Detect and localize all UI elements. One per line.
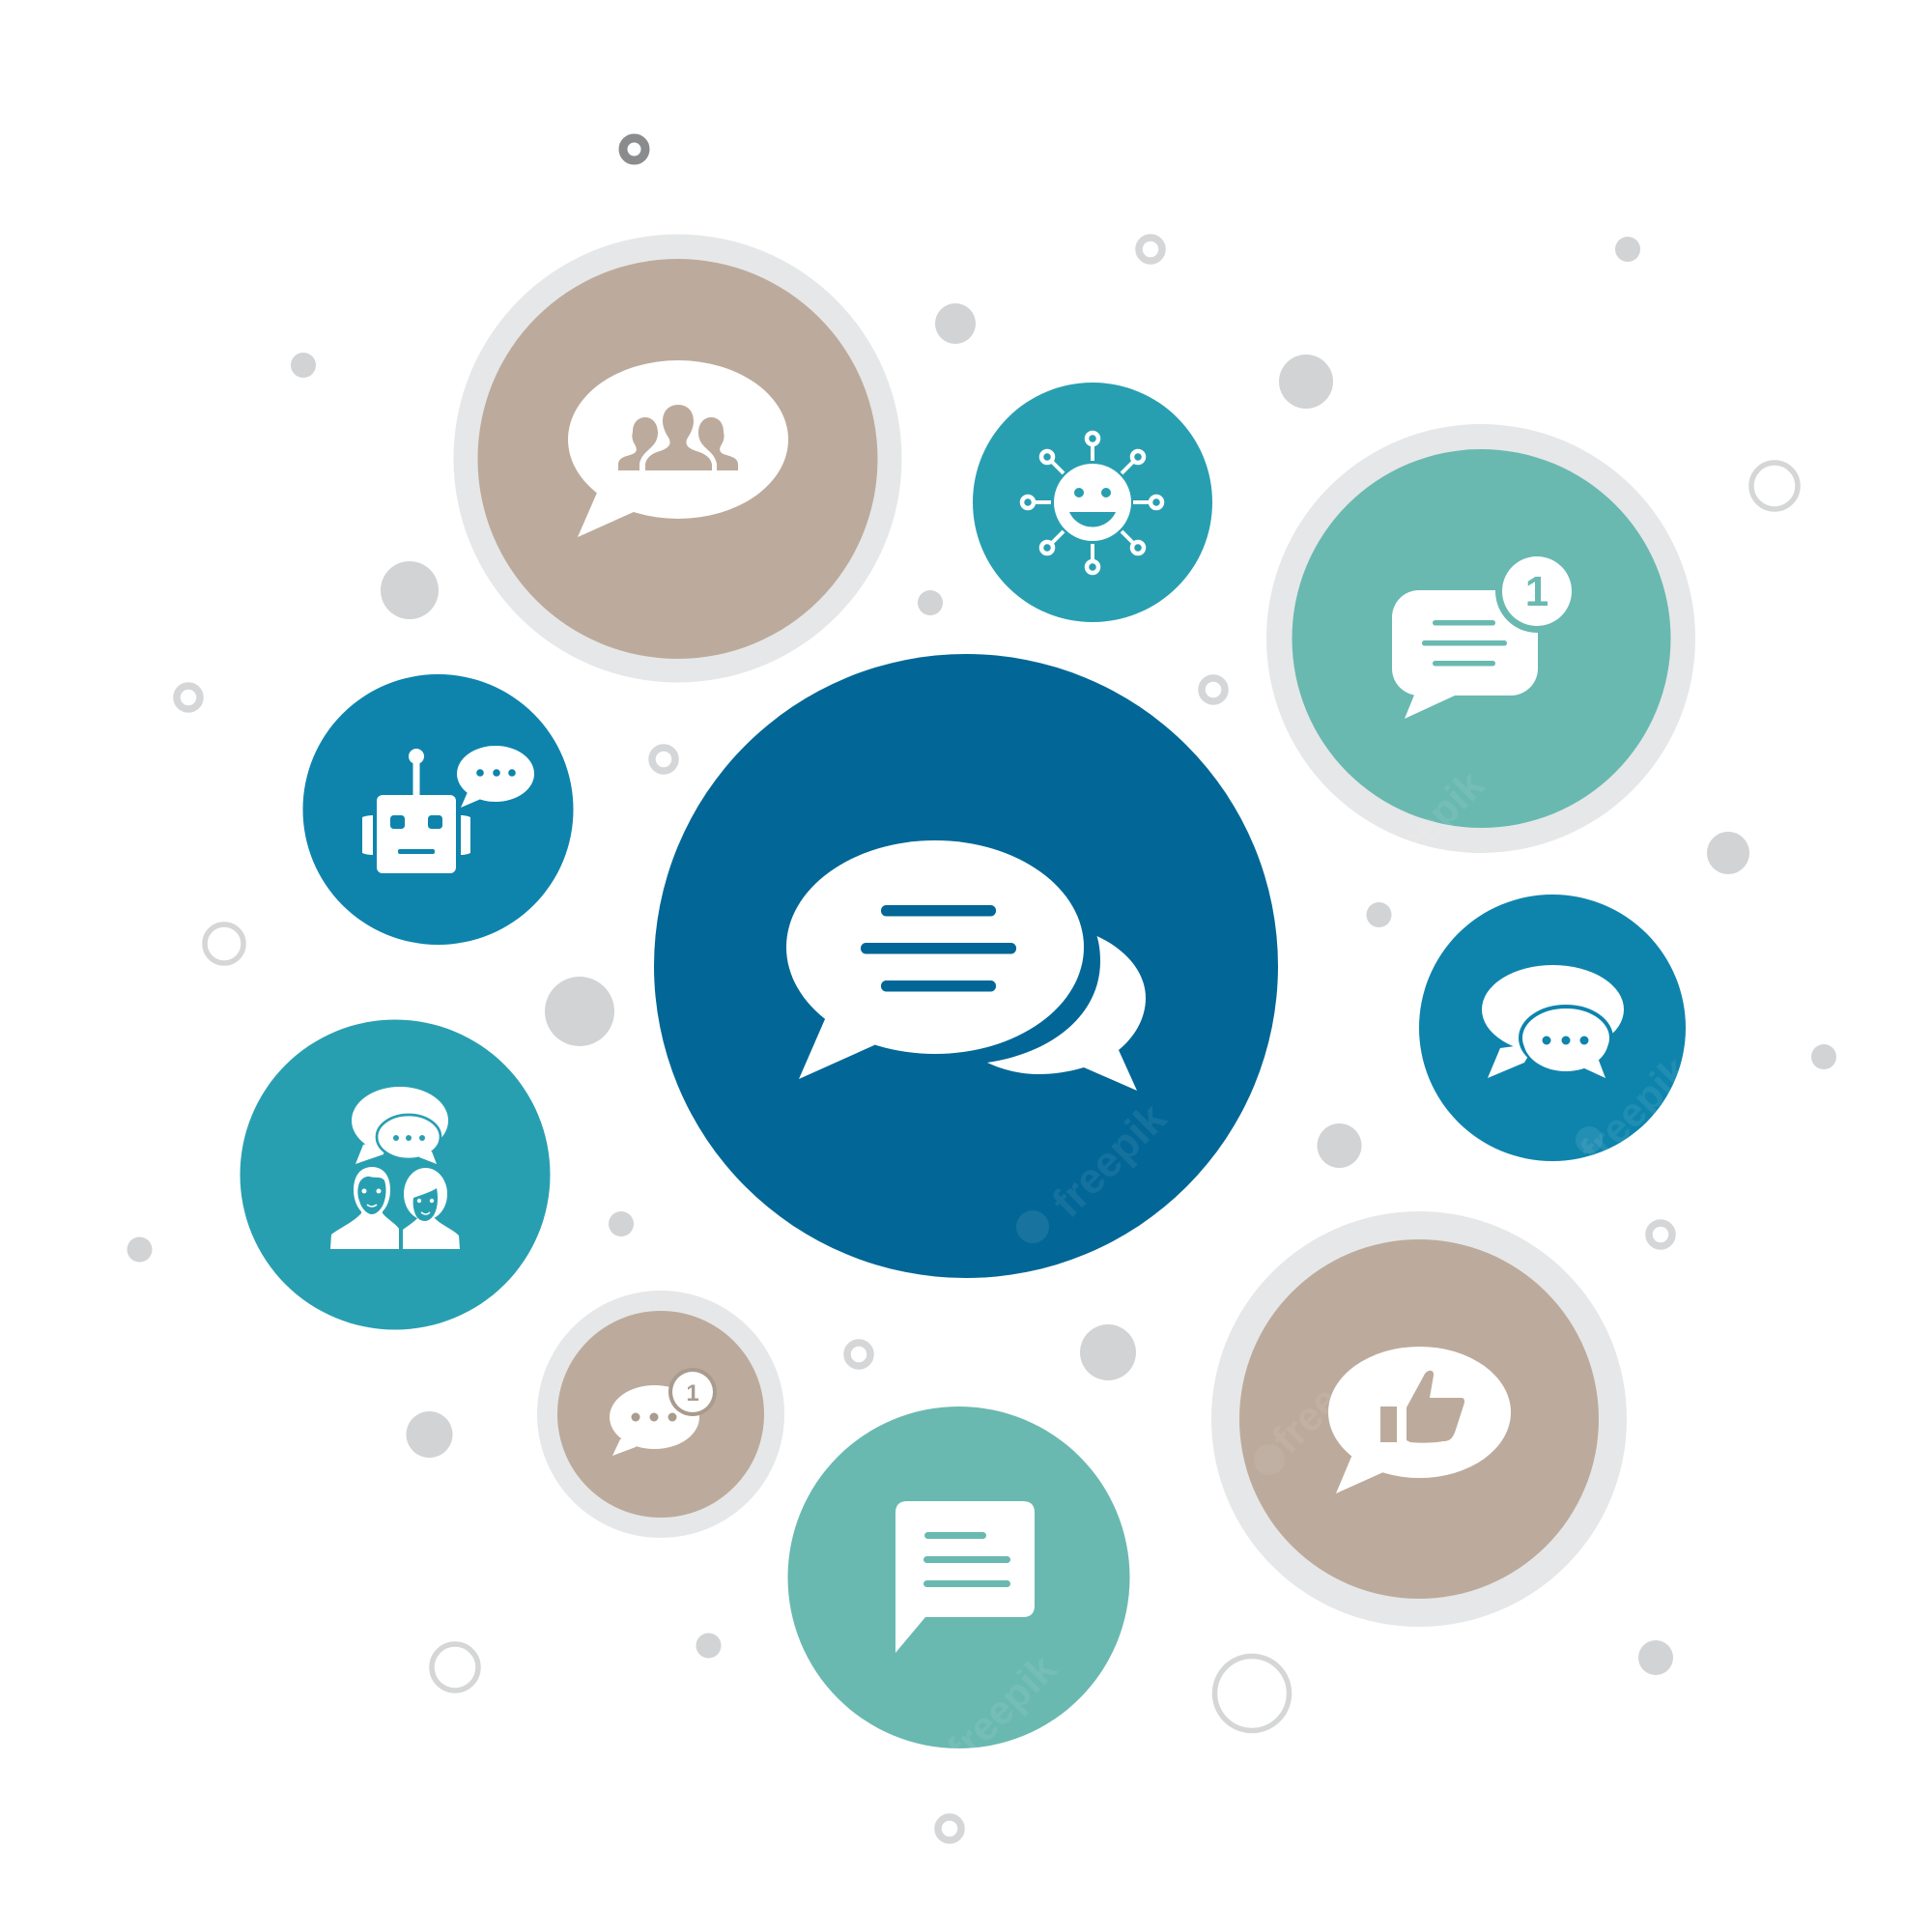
icon: speech bubble with group of people	[568, 360, 788, 537]
watermark: freepik	[938, 1645, 1065, 1772]
icon: robot with speech bubble	[362, 746, 534, 873]
woman figure	[403, 1168, 460, 1249]
icon: two bubbles with dots	[1482, 965, 1624, 1078]
icon: bubble with dots and badge	[610, 1368, 717, 1456]
man figure	[330, 1167, 399, 1249]
panel: thumbs up bubble	[1211, 1211, 1627, 1627]
icon: message with notification badge	[1392, 550, 1578, 719]
panel: robot chatbot	[303, 674, 574, 945]
panel: message notification	[1266, 424, 1695, 888]
watermark: freepik	[1043, 1094, 1176, 1227]
panel: man and woman talking	[240, 1020, 551, 1329]
badge number: 1	[1525, 568, 1548, 615]
watermark: free	[1264, 1378, 1349, 1463]
decorative filled dots	[128, 237, 1836, 1675]
watermark: freepik	[1366, 761, 1493, 888]
icon: smiley with connected nodes	[1022, 433, 1162, 573]
panel: top group chat bubble	[454, 234, 902, 682]
icon: couple with speech bubbles	[330, 1087, 460, 1249]
icon: rectangular message	[895, 1501, 1035, 1653]
watermark: freepik	[1571, 1047, 1697, 1174]
icon: thumbs up in speech bubble	[1328, 1347, 1511, 1493]
panel: smiley network	[973, 383, 1212, 622]
panel: small notification bubble	[537, 1291, 784, 1538]
panel: message card	[788, 1406, 1130, 1772]
panel: central chat bubbles	[654, 654, 1278, 1278]
panel: overlapping bubbles	[1419, 895, 1697, 1174]
badge number: 1	[686, 1380, 699, 1406]
decorative ring dots	[177, 138, 1798, 1840]
icon: main speech bubbles	[786, 840, 1146, 1091]
